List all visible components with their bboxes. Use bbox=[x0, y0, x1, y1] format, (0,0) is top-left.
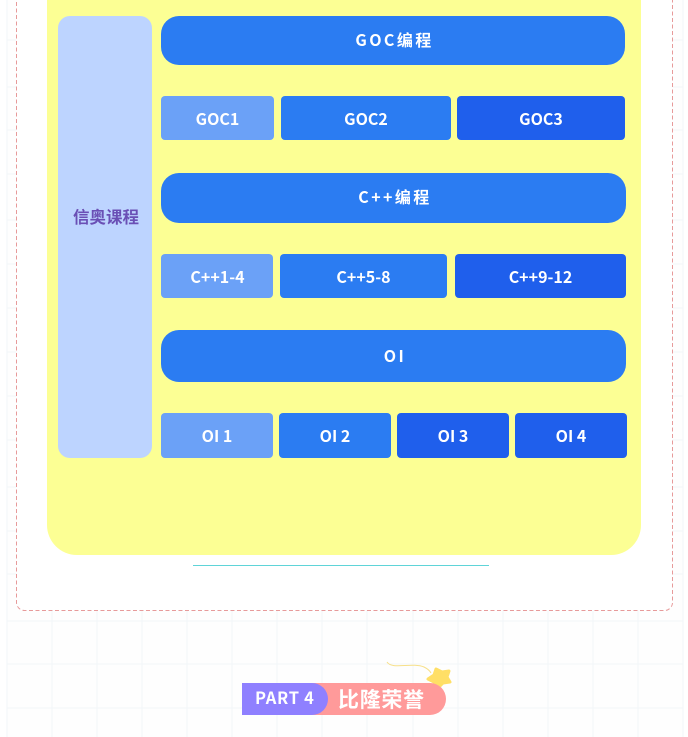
box: OI 3: OI 3 bbox=[438, 423, 468, 447]
box: GOC3: GOC3 bbox=[519, 106, 563, 130]
section tag: PART 4 比隆荣誉 bbox=[242, 683, 446, 715]
bar: OI: OI bbox=[384, 342, 406, 366]
box: C++1-4 bbox=[161, 254, 273, 298]
bar: C++编程 bbox=[161, 172, 626, 222]
box: OI 1: OI 1 bbox=[202, 423, 232, 447]
teal underline bbox=[193, 565, 489, 566]
bar: GOC编程: GOC编程 bbox=[355, 27, 434, 51]
tag label: PART 4: PART 4 bbox=[255, 685, 315, 709]
box: GOC1 bbox=[161, 96, 274, 140]
icon: star with trailing line bbox=[386, 662, 452, 688]
box: C++5-8: C++5-8 bbox=[336, 264, 391, 288]
side label: 信奥课程 bbox=[58, 16, 152, 458]
side label: 信奥课程: 信奥课程 bbox=[73, 204, 139, 228]
bar: C++编程: C++编程 bbox=[358, 184, 432, 208]
box: C++5-8 bbox=[280, 254, 447, 298]
box: OI 1 bbox=[161, 413, 273, 458]
box: OI 3 bbox=[397, 413, 509, 458]
tag label: PART 4 bbox=[242, 683, 328, 715]
box: GOC3 bbox=[457, 96, 625, 140]
box: C++9-12: C++9-12 bbox=[509, 264, 572, 288]
box: OI 4 bbox=[515, 413, 627, 458]
tag title: 比隆荣誉 bbox=[302, 683, 446, 715]
box: GOC2 bbox=[281, 96, 451, 140]
box: OI 4: OI 4 bbox=[556, 423, 586, 447]
box: GOC2: GOC2 bbox=[344, 106, 388, 130]
bar: OI bbox=[161, 330, 626, 382]
tag title: 比隆荣誉: 比隆荣誉 bbox=[338, 684, 425, 714]
panel: yellow course panel bbox=[47, 0, 641, 555]
box: C++9-12 bbox=[455, 254, 626, 298]
bar: GOC编程 bbox=[161, 16, 625, 65]
box: C++1-4: C++1-4 bbox=[190, 264, 245, 288]
box: OI 2 bbox=[279, 413, 391, 458]
box: OI 2: OI 2 bbox=[320, 423, 350, 447]
box: GOC1: GOC1 bbox=[196, 106, 239, 130]
